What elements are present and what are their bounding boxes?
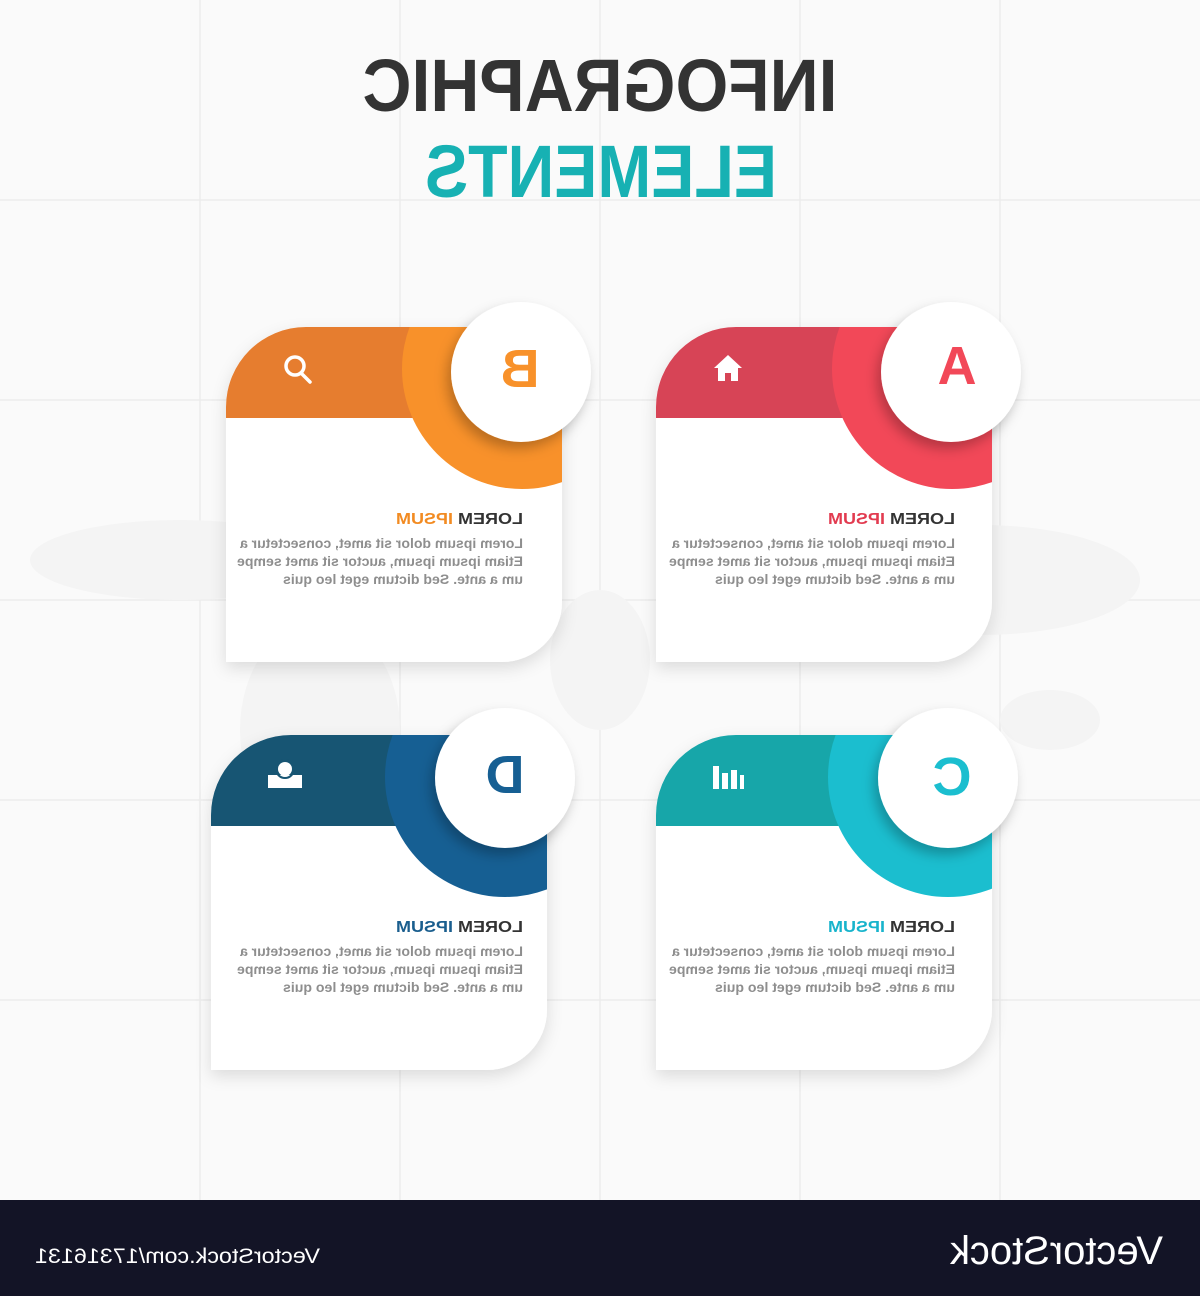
text: body: Lorem ipsum dolor sit amet, consectetur a <box>672 536 955 551</box>
panel: B <box>221 304 594 673</box>
panel: D <box>206 710 578 1081</box>
text: body: um a ante. Sed dictum eget leo quis <box>715 980 955 995</box>
text: body <box>669 944 955 995</box>
text: heading: LOREM IPSUM <box>396 919 523 936</box>
text: body: um a ante. Sed dictum eget leo quis <box>283 980 523 995</box>
letter circle A <box>881 302 1021 442</box>
text: body <box>237 536 523 587</box>
letter circle B: B <box>500 339 540 399</box>
heading: elements: ELEMENTS <box>425 130 777 213</box>
icon: bar chart <box>713 766 744 789</box>
letter circle D: D <box>486 745 524 805</box>
text: body: Lorem ipsum dolor sit amet, consectetur a <box>240 944 523 959</box>
text: heading: LOREM IPSUM <box>396 511 523 528</box>
text: heading: LOREM IPSUM <box>828 511 955 528</box>
text: body: Etiam ipsum ipsum, auctor sit amet sempe <box>237 962 523 977</box>
text: body: um a ante. Sed dictum eget leo quis <box>715 572 955 587</box>
text: body: Etiam ipsum ipsum, auctor sit amet sempe <box>237 554 523 569</box>
text: body: Etiam ipsum ipsum, auctor sit amet sempe <box>669 962 955 977</box>
text: body: um a ante. Sed dictum eget leo quis <box>283 572 523 587</box>
text: body: Lorem ipsum dolor sit amet, consectetur a <box>240 536 523 551</box>
panel: C <box>651 710 1020 1081</box>
letter circle D <box>435 708 575 848</box>
footer logo: VectorStock <box>949 1229 1163 1273</box>
footer url: VectorStock.com/17316131 <box>35 1245 320 1268</box>
text: body <box>237 944 523 995</box>
heading: infographic: INFOGRAPHIC <box>362 44 838 127</box>
letter circle B <box>451 302 591 442</box>
text: body <box>669 536 955 587</box>
icon: magnifier <box>286 357 310 382</box>
footer <box>0 1200 1200 1296</box>
letter circle C <box>878 708 1018 848</box>
text: body: Etiam ipsum ipsum, auctor sit amet sempe <box>669 554 955 569</box>
title <box>362 44 838 213</box>
panel: A <box>651 304 1024 673</box>
letter circle C: C <box>932 747 972 807</box>
letter circle A: A <box>938 336 976 396</box>
text: body: Lorem ipsum dolor sit amet, consectetur a <box>672 944 955 959</box>
text: heading: LOREM IPSUM <box>828 919 955 936</box>
icon: person <box>268 760 302 788</box>
icon: house <box>714 355 742 381</box>
